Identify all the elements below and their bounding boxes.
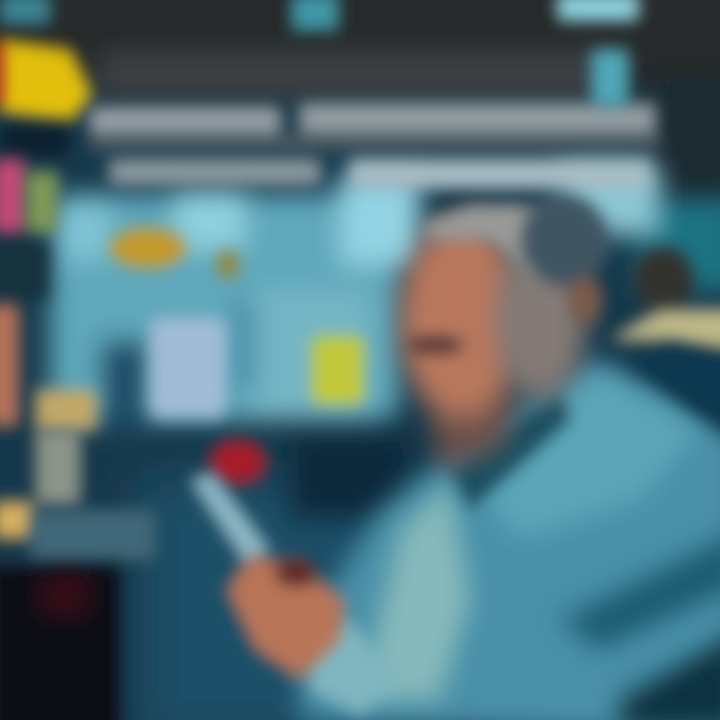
icon: red element <box>210 440 266 484</box>
icon: yellow badge <box>110 228 240 279</box>
table <box>30 510 155 560</box>
left figure <box>0 305 18 425</box>
hand with phone <box>190 440 345 680</box>
heading: blurred title band <box>90 104 660 188</box>
shirt <box>300 360 720 720</box>
phone <box>190 472 270 570</box>
cuff <box>306 620 400 716</box>
icon: green block <box>26 172 58 232</box>
icon: pink block <box>0 160 24 232</box>
icon: yellow block <box>0 40 92 122</box>
background person <box>610 246 720 440</box>
face <box>400 220 524 420</box>
left shelf: colourful items <box>0 40 155 720</box>
mouth shadow <box>407 335 463 355</box>
card: lilac <box>150 318 226 418</box>
panel: light blue screen <box>50 165 660 430</box>
icons: top light fixtures <box>0 0 638 106</box>
bottle <box>36 390 96 430</box>
man <box>300 194 720 720</box>
hand <box>226 555 345 680</box>
dark under-table <box>0 566 120 720</box>
neck <box>430 390 520 470</box>
hair <box>420 205 570 280</box>
collar shadow <box>450 390 570 510</box>
ear <box>569 276 601 324</box>
card: yellow-green <box>312 336 364 404</box>
